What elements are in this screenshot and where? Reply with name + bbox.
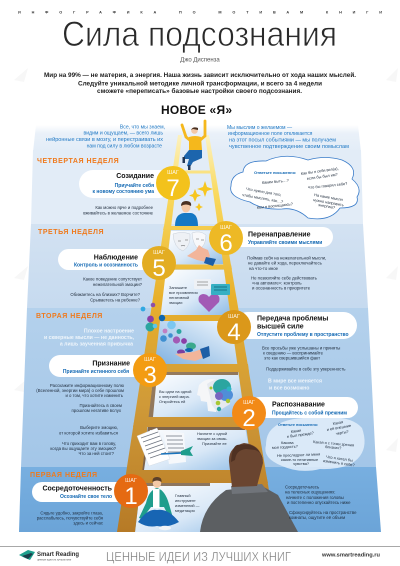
week label 3: ТРЕТЬЯ НЕДЕЛЯ [38,229,104,236]
cloud: questions top: Ответьте письменно: [254,170,296,175]
step 7 badge: 7 [166,175,180,202]
step 3 text: когда вы ощущаете эту эмоцию? [50,446,117,451]
note: alone with energy: с энергией мира. [159,394,190,399]
step 3 text: Выберите эмоцию, [80,425,118,430]
cloud: questions top [231,156,359,219]
white slogan: bad mood [44,328,135,348]
footer slogan: ЦЕННЫЕ ИДЕИ ИЗ ЛУЧШИХ КНИГ [106,550,291,564]
footer logo icon [19,550,35,560]
step 4 white slogan [268,378,322,392]
step 3 [36,353,167,456]
title: Сила подсознания [62,15,337,54]
step 3 text: Что за ней стоит? [78,451,115,456]
step 7 text: вживайтесь в желаемое состояние [83,210,154,216]
footer brand: ценные идеи из лучших книг [37,558,71,562]
week label 2: ВТОРАЯ НЕДЕЛЯ [36,313,103,320]
step 5 [58,246,176,302]
figure: man in blue shirt [175,201,198,226]
step 4 badge: ШАГ [228,314,240,320]
intro blue text right: на этот посыл событиями — мы получаем [229,138,337,144]
note: alone with energy: Откройтесь ей [159,399,185,404]
ladder left rail [117,135,182,532]
cloud: questions bottom: близких? [325,444,342,450]
step 6 [209,221,333,290]
step 6 text [247,256,326,290]
body focus text: начните с положения головы [286,495,344,500]
cloud: questions bottom: я был прежде? [286,430,315,439]
cloud: questions bottom: Какова [281,440,294,445]
step 6 badge [209,221,243,257]
step 6 pill [226,227,333,247]
step 6 subtitle: Управляйте своими мыслями [248,239,322,246]
body focus text: Сфокусируйтесь на пространстве [289,510,357,515]
icon: head with colourful brain [197,379,233,412]
step 3 badge: ШАГ [144,357,156,363]
step 3 pill [49,355,150,377]
step 6 text: и осознанность в приоритете [252,286,311,290]
step 7 badge [156,166,190,202]
icon: open hand holding bubbles [175,346,210,361]
step 6 text: Не позволяйте себе действовать [251,276,318,280]
cloud: questions bottom: Какая я с точки зрения [313,439,354,448]
intro blue text left [46,124,165,150]
step 7 badge: ШАГ [167,170,179,176]
watermark logos [14,68,398,452]
step 2 subtitle: Прощайтесь с собой прежним [272,410,347,416]
icon: sparkles [189,181,213,211]
figure: jumping man [182,121,205,170]
step 1 badge: 1 [124,483,138,510]
cloud: questions top: если бы был им? [306,172,339,181]
intro text: Следуйте уникальной методике личной трансформации, и всего за 4 недели [78,80,322,88]
step 1 text: здесь и сейчас [73,520,104,526]
step 1 [32,474,148,526]
note: write down emotions: эмоции [169,300,182,305]
step 4 pill [234,312,357,339]
step 6 text: «на автомате»: контроль [252,280,302,286]
step 4 heading: Передача проблемы [257,314,328,322]
step 3 text: и о том, что хотите изменить [65,393,124,398]
cloud: questions bottom: Что я хотел бы [326,454,353,463]
note: alone with energy: Вы одни на одной [159,389,191,394]
step 4 badge: 4 [227,319,241,346]
step 4 text: Все просьбы уже услышаны и приняты [262,346,340,350]
step 3 text: Признайтесь в своем [80,403,122,408]
week label 1: ПЕРВАЯ НЕДЕЛЯ [30,472,98,479]
step 5 badge: 5 [152,255,166,282]
step 4 text: это как свершившийся факт [264,356,320,360]
step 5 text: Обижаетесь на близких? Ворчите? [70,292,141,297]
step 4 badge [217,310,251,346]
note: start with one emotion [197,431,227,446]
step 3 text: прошлом негативе вслух [71,408,122,413]
note: meditation: инструмент [175,498,196,503]
footer brand: Smart Reading [37,551,79,558]
note: start with one emotion: Начните с одной [197,431,227,436]
ladder right rail [205,135,276,532]
note: start with one emotion: эмоции за связь. [197,436,227,441]
step 5 subtitle: Контроль и осознанность [74,262,138,268]
step 6 text: на что-то иное [249,266,279,271]
step 2 badge: ШАГ [243,400,255,406]
icon: heart with speech bubbles [194,279,230,312]
step 4 text [262,346,346,372]
footer website: www.smartreading.ru [321,552,380,558]
intro text: Мир на 99% — не материя, а энергия. Наша жизнь зависит исключительно от хода наших мыслей. [44,72,356,79]
step 1 text [37,510,104,526]
step 1 badge [114,474,148,510]
icon: papers with pen [137,428,193,466]
intro text [44,72,356,95]
intro blue text right: чувственное подтверждение своим помыслам [229,144,350,150]
step 2 heading: Распознавание [272,402,325,408]
figure: meditating man [138,477,179,530]
cloud: questions bottom [265,417,365,471]
step 7 subtitle [93,182,154,195]
step 4 heading: высшей силе [257,322,304,330]
note: write down emotions: негативной [169,295,189,300]
step 5 badge [142,246,176,282]
intro blue text left: видим и ощущаем, — всего лишь [84,130,163,136]
step 2 badge [232,396,266,432]
step 3 text: (Вселенной, энергии мира) о себе прошлом [36,388,124,393]
note: alone with energy [159,389,191,404]
step 6 badge: ШАГ [220,225,232,231]
note: meditation: изменений — [175,503,200,508]
step 4 white slogan: и все возможно [269,386,309,392]
cloud: questions top: Как бы я себя вел(а), [300,166,339,176]
footer brand [37,551,79,562]
step 7 subtitle: Приучайте себя [115,182,154,189]
cloud: questions bottom: какие-то негативные [281,457,318,462]
step 3 subtitle: Признайте истинного себя [63,368,129,375]
cloud: questions bottom: Какая [332,419,344,426]
cloud: questions bottom: чувства? [293,461,310,466]
intro blue text right [227,125,350,150]
step 1 heading: Сосредоточенность [42,486,113,492]
body focus text: и постепенно опускайтесь ниже [287,500,351,505]
cloud: questions top: На какие мысли [314,192,343,202]
step 1 badge: ШАГ [125,478,137,484]
step 6 text: не давайте ей хода, переключайтесь [248,260,323,266]
intro blue text left: нам под силу в любом возрасте [87,144,162,150]
cloud: questions bottom: и её внешние [326,423,351,432]
body focus text: на телесных ощущениях: [285,490,335,494]
step 7 pill [79,170,173,198]
white slogan: bad mood: а лишь заученная привычка [60,342,133,348]
step 5 text: нежелательной эмоции? [93,282,143,287]
step 4 text: Поддерживайте в себе эту уверенность [266,366,346,372]
cloud: questions bottom: черты? [335,429,350,436]
cloud: questions top: Что бы говорил себе? [308,181,348,190]
icon: theatre masks with hand [173,232,216,266]
cloud: questions bottom: моя гордость? [272,444,299,450]
step 7 heading: Созидание [116,173,154,180]
white slogan: bad mood: Плохое настроение [84,328,134,334]
cloud: questions bottom: Какая [290,428,302,434]
step 4 [217,310,357,392]
white slogan: bad mood: и скверные мысли — не данность, [44,335,135,341]
step 1 text: расслабьтесь, почувствуйте себя [37,516,104,520]
step 7 [79,166,190,216]
step 5 badge: ШАГ [153,250,165,256]
step 7 text [83,205,154,216]
note: start with one emotion: Признайте ее [202,441,227,446]
step 5 pill [58,249,159,270]
step 5 text: Срываетесь на ребенке? [90,298,141,302]
step 3 text: от которой хотите избавиться [59,430,119,436]
note: meditation: Главный [175,493,191,498]
week label 4: ЧЕТВЕРТАЯ НЕДЕЛЯ [37,158,119,165]
step 6 badge: 6 [219,230,233,257]
cloud: questions bottom: изменить в себе? [323,458,356,468]
step 2 pill [249,397,358,418]
step 4 heading [257,314,328,330]
ladder window panes [135,231,261,532]
step 2 [232,396,358,432]
ladder [117,135,276,532]
background panel with four week bands [19,125,381,532]
step 4 white slogan: В мире все меняется [268,378,322,384]
heading: new self: НОВОЕ «Я» [161,103,232,117]
step 1 subtitle: Осознайте свое тело [60,493,112,500]
intro blue text left: Все, что мы знаем, [120,124,165,130]
cloud: questions top: Кем я восхищаюсь? [257,201,294,210]
ladder rungs [124,170,268,483]
step 1 pill [32,482,131,502]
body focus text: Сосредоточьтесь [285,484,320,490]
step 6 text: Поймав себя на нежелательной мысли, [247,256,326,260]
step 3 text: Что приходит вам в голову, [62,441,116,446]
cloud: questions top: нужно направить [313,197,344,207]
step 7 subtitle: к новому состоянию ума [93,189,154,195]
step 3 badge: 3 [143,362,157,389]
author: Джо Диспенза [180,58,220,64]
note: write down emotions: Запишите [169,285,187,290]
footer divider [0,546,400,547]
step 5 text [70,276,143,302]
step 4 text: к сведению — воспринимайте [263,350,324,356]
step 3 text [36,383,125,456]
cloud: questions bottom: Ответьте письменно: [278,423,318,427]
note: write down emotions: все проявления [169,290,198,295]
step 5 text: Какое поведение сопутствует [83,276,142,282]
body focus text: комнаты, ощутите её объем [289,515,345,520]
step 3 heading: Признание [92,360,130,368]
intro blue text left: нейронные связи в мозгу, и перестраивать их [46,136,163,143]
step 7 text: Как можно ярче и подробнее [95,205,154,210]
intro blue text right: информационное поле откликается [228,131,313,137]
step 3 text: Расскажите информационному полю [50,383,125,388]
note: write down emotions [169,285,198,305]
intro text: сможете «переписать» базовые настройки своего подсознания. [97,88,302,95]
icon: coloured thought bubbles [141,303,196,354]
body focus text [285,484,357,520]
figure: man seen from behind [200,443,298,532]
step 2 badge: 2 [242,405,256,432]
step 5 heading: Наблюдение [94,254,138,262]
cloud: questions bottom: Не преследуют ли меня [277,451,320,458]
cloud: questions top: чтобы мыслить, как…? [242,192,284,204]
step 1 text: Сядьте удобно, закройте глаза, [40,510,103,516]
step 6 heading: Перенаправление [248,232,311,238]
cloud: questions top: энергию? [318,202,336,210]
header tagline: ИНФОГРАФИКА ПО МОТИВАМ КНИГИ [18,10,382,14]
step 3 badge [133,353,167,389]
cloud: questions top: Что нужно для того, [246,186,282,197]
note: meditation: медитация [175,508,195,513]
intro blue text right: Мы мыслим о желаемом — [227,125,293,131]
step 4 subtitle: Отпустите проблему в пространство [257,331,349,338]
cloud: questions top: Каким быть…? [262,178,290,185]
note: meditation [175,493,200,513]
